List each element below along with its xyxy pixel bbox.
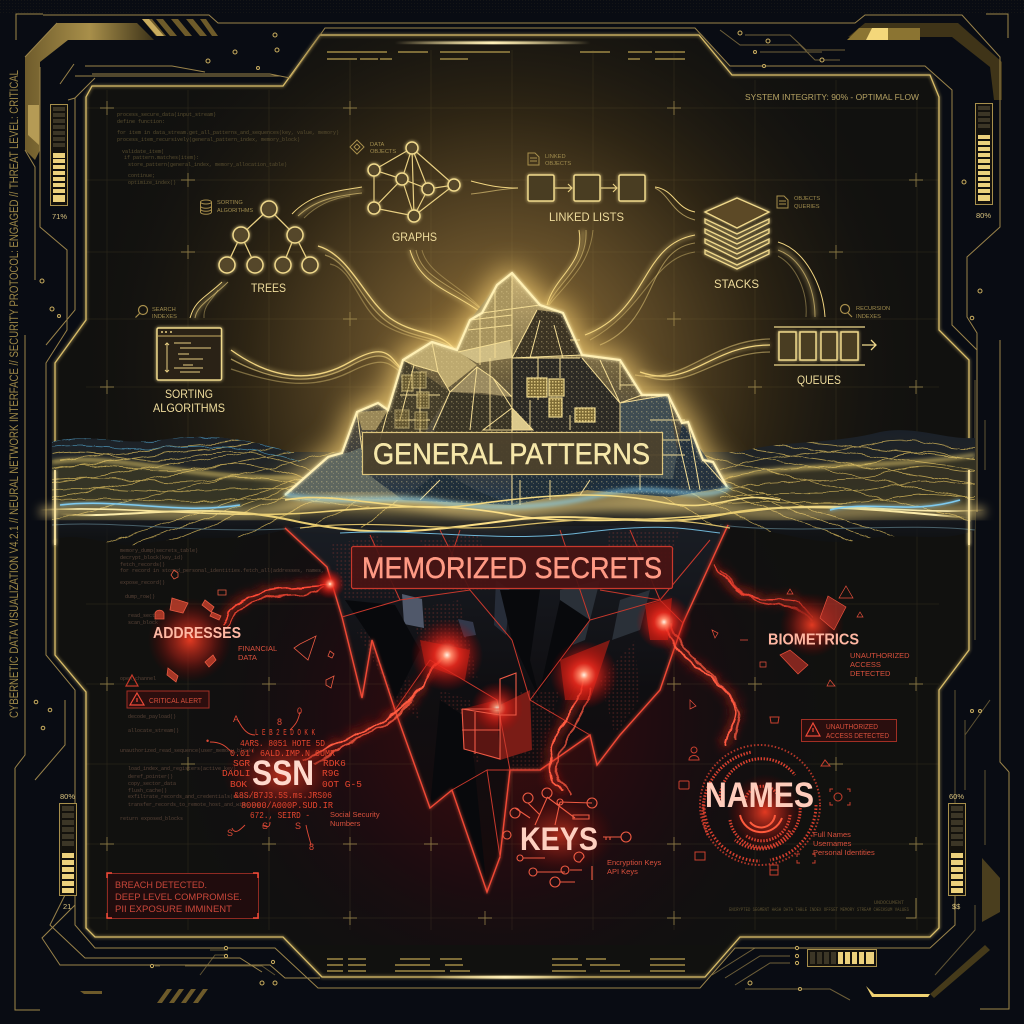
code block: top left: store_pattern(general_index, memory_allocation_table) xyxy=(128,162,287,168)
stream to names xyxy=(664,620,740,745)
note: graphs caption: OBJECTS xyxy=(370,149,396,155)
code block: left lower: expose_record() xyxy=(120,580,165,586)
flow ribbons from sorting algorithms xyxy=(231,350,405,383)
code block: left lower: dump_row() xyxy=(125,594,155,600)
iceberg: underwater panels xyxy=(330,530,680,892)
header and footer data strips xyxy=(327,51,685,972)
ssn data text cloud: 4ARS. 8051 HOTE 5D xyxy=(240,738,325,749)
code block: top left: validate_item( xyxy=(122,149,164,155)
alert: unauthorized access xyxy=(802,720,896,742)
node: stacks xyxy=(705,196,820,291)
gauge: left top 71% xyxy=(50,104,68,221)
alert: breach detected: BREACH DETECTED. xyxy=(115,880,207,891)
iceberg: bright outline xyxy=(285,273,727,495)
biometrics caption: DETECTED xyxy=(850,669,891,678)
red energy streams xyxy=(222,565,812,795)
label: sorting algorithms xyxy=(153,387,225,415)
ssn data text cloud: SGR xyxy=(233,758,250,769)
gauge: left bottom: 80% xyxy=(60,792,75,801)
ssn caption: Social Security xyxy=(330,810,380,819)
label: sorting algorithms: ALGORITHMS xyxy=(153,401,225,415)
ssn scattered glyphs xyxy=(206,706,314,852)
gauge: right top 80%: 80% xyxy=(976,211,991,220)
gauge: right bottom xyxy=(948,792,966,911)
note: trees database icon xyxy=(200,200,212,214)
code block: left lower xyxy=(120,548,342,822)
note: trees caption: SORTING xyxy=(217,200,243,206)
code block: top left: process_item_recursively(general_pattern_index, memory_block) xyxy=(117,137,300,143)
label: stacks: STACKS xyxy=(714,277,759,291)
ssn scattered glyphs: 0 xyxy=(297,706,302,716)
ssn data text cloud: BOK xyxy=(230,779,247,790)
note: sorting caption xyxy=(152,307,177,320)
code strip: bottom right xyxy=(729,898,916,918)
stream to ssn xyxy=(305,655,447,765)
code block: top left: define function: xyxy=(117,119,165,125)
ssn data text cloud: &8S/B7J3.5S.ms.JRS06 xyxy=(234,790,332,801)
code block: left lower: decrypt_block(key_id) xyxy=(120,555,183,561)
biometrics debris xyxy=(690,586,863,709)
stream to addresses xyxy=(222,584,330,630)
keys caption: API Keys xyxy=(607,867,638,876)
code block: left lower: return exposed_blocks xyxy=(120,816,183,822)
note: linked lists caption: LINKED xyxy=(545,154,566,160)
ssn data text cloud: L E B 2 E D O K K xyxy=(255,727,315,738)
addresses caption xyxy=(238,644,277,662)
code block: top left: continue; xyxy=(128,173,155,179)
note: graphs icon xyxy=(350,140,364,154)
flow: linked lists to stacks xyxy=(655,187,695,220)
code block: top left: if pattern.matches(item): xyxy=(124,155,199,161)
node: sorting algorithms xyxy=(136,306,225,415)
gauge: right bottom: $$ xyxy=(952,902,961,911)
alert: critical alert: CRITICAL ALERT xyxy=(149,696,202,705)
label: queues: QUEUES xyxy=(797,373,841,387)
names caption: Full Names xyxy=(813,830,851,839)
addresses label: ADDRESSES xyxy=(153,625,241,642)
note: linked lists caption xyxy=(545,154,571,167)
flows into iceberg xyxy=(190,181,825,383)
status text: system integrity: SYSTEM INTEGRITY: 90% - OPTIMAL FLOW xyxy=(745,92,919,102)
node: biometrics xyxy=(690,586,910,709)
node: ssn xyxy=(206,706,380,852)
alert: critical alert xyxy=(126,675,209,708)
node: linked lists xyxy=(528,153,645,224)
code block: top left: for item in data_stream.get_all_patterns_and_sequences(key, value, memory) xyxy=(117,130,339,136)
iceberg: underwater mass xyxy=(285,525,728,892)
note: queues caption: RECURSION xyxy=(856,306,890,312)
stream to biometrics xyxy=(715,565,812,622)
code strip: bottom right: ENCRYPTED SEGMENT HASH DATA TABLE INDEX OFFSET MEMORY STREAM CHECKSUM VALUES xyxy=(729,907,909,913)
note: trees caption: ALGORITHMS xyxy=(217,208,253,214)
iceberg: lit and dark facets xyxy=(285,273,727,505)
code block: left lower: fetch_records() xyxy=(120,562,165,568)
biometrics caption xyxy=(850,651,910,678)
names spiral xyxy=(700,745,820,865)
code block: left lower: unauthorized_read_sequence(user_memory_block) xyxy=(120,748,255,754)
note: queues icon xyxy=(840,304,852,317)
gauge: left bottom: 21 xyxy=(63,902,71,911)
ssn connector glyphs xyxy=(210,712,311,845)
label: sorting algorithms: SORTING xyxy=(165,387,213,401)
alert: unauthorized access: UNAUTHORIZED xyxy=(826,722,878,731)
note: linked lists icon xyxy=(528,153,539,165)
flow ribbons from queues xyxy=(635,339,770,380)
water surface mesh xyxy=(52,430,975,546)
node: keys xyxy=(503,788,661,887)
node: addresses xyxy=(148,570,334,688)
addresses caption: FINANCIAL xyxy=(238,644,277,653)
code block: top left: optimize_index() xyxy=(128,180,176,186)
gauge: left bottom xyxy=(60,792,76,911)
banner: general patterns: GENERAL PATTERNS xyxy=(373,438,650,471)
label: trees: TREES xyxy=(251,281,286,295)
iceberg: facet lines xyxy=(357,273,727,505)
flow ribbons from stacks xyxy=(585,235,695,345)
ssn data text cloud: 80000/A000P.SUD.IR xyxy=(241,800,333,811)
code block: left lower: load_index_and_registers(active_key) xyxy=(128,766,236,772)
code block: top left: process_secure_data(input_stream) xyxy=(117,112,216,118)
code block: left lower: decode_payload() xyxy=(128,714,176,720)
addresses caption: DATA xyxy=(238,653,257,662)
note: linked lists caption: OBJECTS xyxy=(545,161,571,167)
ssn caption xyxy=(330,810,380,828)
iceberg hot spots xyxy=(315,569,692,759)
ssn scattered glyphs: 8 xyxy=(277,717,282,727)
ssn scattered glyphs: S xyxy=(227,828,233,838)
names caption: Usernames xyxy=(813,839,852,848)
keys network xyxy=(503,788,631,887)
ssn label: SSN xyxy=(252,754,314,793)
node: graphs xyxy=(350,140,460,244)
note: graphs caption: DATA xyxy=(370,142,385,148)
node: queues xyxy=(774,304,890,387)
node: trees xyxy=(200,200,318,295)
code block: left lower: transfer_records_to_remote_host_and_wipe_log xyxy=(128,802,260,808)
biometrics caption: ACCESS xyxy=(850,660,881,669)
ssn data text cloud: 672., SEIRD - xyxy=(250,810,310,821)
flow: sorting to trees xyxy=(190,282,228,318)
ssn data text cloud: R9G xyxy=(322,768,339,779)
note: stacks caption: OBJECTS xyxy=(794,196,820,202)
code block: left lower: allocate_stream() xyxy=(128,728,179,734)
flow: trees to graphs xyxy=(292,187,362,218)
note: sorting icon xyxy=(136,306,148,318)
ssn data text cloud: DAOLI xyxy=(222,768,251,779)
iceberg: visible tip xyxy=(285,273,727,505)
names caption xyxy=(813,830,875,857)
ssn data text cloud: 0.01' 6ALD.IMP.N 0UMR xyxy=(230,748,335,759)
flow: stacks to queues xyxy=(778,242,825,317)
code block: left lower: for record in stored_personal_identities.fetch_all(addresses, names, keys) xyxy=(120,568,342,574)
background grid with crosshairs xyxy=(86,50,939,930)
page background xyxy=(108,36,901,945)
code block: left lower: read_sector xyxy=(128,613,161,619)
code block: left lower: memory_dump(secrets_table) xyxy=(120,548,198,554)
note: stacks icon xyxy=(777,196,788,208)
keys label: KEYS xyxy=(520,821,598,857)
keys caption xyxy=(607,858,661,876)
waterline xyxy=(20,487,1005,537)
code block: left lower: open_channel xyxy=(120,676,156,682)
note: trees caption xyxy=(217,200,253,214)
alert: unauthorized access: ACCESS DETECTED xyxy=(826,731,889,740)
code block: left lower: flush_cache() xyxy=(128,788,167,794)
names caption: Personal Identities xyxy=(813,848,875,857)
ssn scattered glyphs: S xyxy=(295,821,301,831)
note: sorting caption: INDEXES xyxy=(152,314,177,320)
names surrounding icons xyxy=(679,717,850,875)
ssn scattered glyphs: A xyxy=(233,714,239,724)
code block: left lower: exfiltrate_records_and_credentials(output) xyxy=(128,794,254,800)
ssn data text cloud: 0OT G-5 xyxy=(322,779,362,790)
addresses debris icons xyxy=(155,570,334,688)
names label: NAMES xyxy=(705,776,814,815)
note: queues caption: INDEXES xyxy=(856,314,881,320)
gauge: left top 71%: 71% xyxy=(52,212,67,221)
ssn data text cloud: RDK6 xyxy=(323,758,346,769)
flow: graphs to linked lists xyxy=(471,181,518,194)
gauge: right top 80% xyxy=(976,104,992,220)
biometrics label: BIOMETRICS xyxy=(768,632,859,648)
keys caption: Encryption Keys xyxy=(607,858,661,867)
ssn data text cloud xyxy=(222,727,362,821)
code block: left lower: copy_sector_data xyxy=(128,781,176,787)
code block: top left xyxy=(117,112,339,186)
alert: breach detected: PII EXPOSURE IMMINENT xyxy=(115,904,232,915)
ssn scattered glyphs: 8 xyxy=(309,842,314,852)
node: names xyxy=(679,717,875,875)
biometrics caption: UNAUTHORIZED xyxy=(850,651,910,660)
label: graphs: GRAPHS xyxy=(392,230,437,244)
iceberg: data squares xyxy=(395,372,595,429)
note: queues caption xyxy=(856,306,890,320)
flow ribbons from linked lists xyxy=(547,230,593,305)
flow ribbons from graphs xyxy=(410,250,484,313)
code block: left lower: scan_block xyxy=(128,620,158,626)
code strip: bottom right: UNDOCUMENT xyxy=(874,900,904,906)
ssn scattered glyphs: S xyxy=(262,821,268,831)
ssn scattered glyphs: • xyxy=(206,736,209,746)
alert: breach detected: DEEP LEVEL COMPROMISE. xyxy=(115,892,242,903)
note: graphs caption xyxy=(370,142,396,155)
gauge: bottom horizontal xyxy=(808,950,876,966)
note: stacks caption xyxy=(794,196,820,210)
note: stacks caption: QUERIES xyxy=(794,204,820,210)
flow ribbons from trees xyxy=(318,246,460,352)
code block: left lower: deref_pointer() xyxy=(128,774,173,780)
gauge: right bottom: 60% xyxy=(949,792,964,801)
note: sorting caption: SEARCH xyxy=(152,307,176,313)
alert: breach detected xyxy=(107,873,258,918)
ssn caption: Numbers xyxy=(330,819,361,828)
label: linked lists: LINKED LISTS xyxy=(549,210,624,224)
banner: memorized secrets: MEMORIZED SECRETS xyxy=(362,552,662,585)
stream to keys xyxy=(550,675,590,795)
